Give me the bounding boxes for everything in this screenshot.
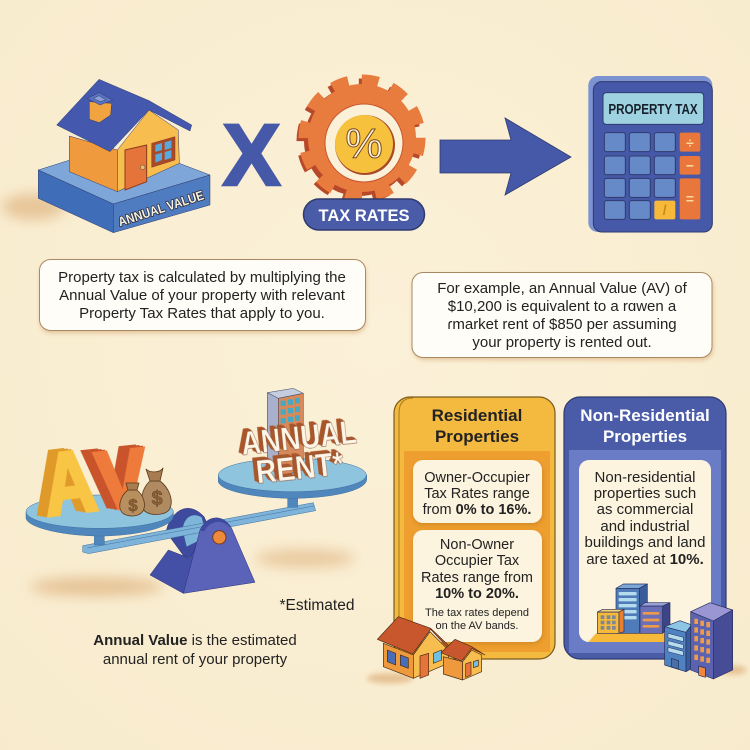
icon: calculator [588,76,712,232]
3D text: annual rent: RENT* [254,445,346,491]
icon: money bags: $ [128,496,138,515]
illustration: balance scale [26,388,367,596]
estimated note: *Estimated [280,597,354,614]
3D text: annual rent: ANNUAL [239,413,358,462]
annual value definition: annual rent of your property [103,651,288,668]
pill: tax rates [304,199,424,230]
percent sign: % [345,120,383,167]
arrow [440,118,571,195]
card: non-owner occupier rates: Non-Owner [440,537,514,553]
multiply sign: X [222,107,281,204]
residential heading [432,406,522,446]
3D letters: AV [37,431,151,535]
icon: money bags [120,468,171,516]
pill: tax rates: TAX RATES [318,207,410,225]
card: owner-occupier rates [413,460,543,525]
residential heading: Residential [432,406,522,425]
non-residential heading [580,406,710,446]
3D letters: AV: V [92,431,151,528]
card: non-residential rate: properties such [594,485,696,502]
card: non-residential rate: as commercial [597,501,693,518]
text box: example: For example, an Annual Value (AV) of [437,280,688,297]
text box: how property tax is calculated: Annual Value of your property with relevant [59,287,346,304]
icon: commercial buildings [588,584,747,679]
text box: how property tax is calculated: Property tax is calculated by multiplying the [58,269,346,286]
card: non-residential rate: Non-residential [595,469,695,486]
annual value definition [93,632,297,668]
text box: example: ɾmarket rent of $850 per assuming [447,316,677,333]
icon: house on annual value base [2,79,210,233]
card: non-owner occupier rates: on the AV bands. [436,620,518,632]
left pan [26,512,173,536]
card: non-residential rate: and industrial [600,518,690,535]
card: owner-occupier rates: Tax Rates range [424,486,530,502]
text box: how property tax is calculated: Property Tax Rates that apply to you. [79,305,325,322]
panel: residential properties [394,397,555,659]
fulcrum back arch [166,508,213,560]
card: non-owner occupier rates [413,530,543,644]
calculator screen text: PROPERTY TAX [608,102,698,118]
panel: non-residential properties [564,397,726,659]
icon: gear with percent [303,81,419,197]
3D letters: AV: A [37,432,102,535]
icon: calculator: ÷ [686,134,694,150]
beam [83,503,316,554]
card: non-residential rate: buildings and land [585,534,705,551]
non-residential heading: Non-Residential [580,406,710,425]
annual value definition: Annual Value is the estimated [93,632,297,649]
text box: example: your property is rented out. [472,334,652,351]
icon: calculator: / [663,201,667,217]
text box: example [412,272,713,360]
card: non-owner occupier rates: 10% to 20%. [435,586,519,602]
right pan [218,475,367,498]
icon: calculator: = [686,190,694,206]
text box: how property tax is calculated [40,260,366,333]
residential heading: Properties [435,427,519,446]
card: non-residential rate: are taxed at 10%. [586,551,704,568]
card: non-owner occupier rates: The tax rates depend [425,607,529,619]
icon: calculator: − [686,157,694,173]
text box: example: $10,200 is equivalent to a rɑwen a [448,298,677,315]
card: non-owner occupier rates: Occupier Tax [435,553,520,569]
non-residential heading: Properties [603,427,687,446]
card: owner-occupier rates: Owner-Occupier [424,470,530,486]
card: owner-occupier rates: from 0% to 16%. [423,502,531,518]
card: non-owner occupier rates: Rates range from [421,570,533,586]
icon: residential houses [367,617,485,684]
3D text: annual rent [239,413,358,491]
fulcrum side and front [150,537,200,593]
annual value label: ANNUAL VALUE [116,187,206,229]
card: non-residential rate [579,460,711,642]
icon: money bags: $ [151,488,163,510]
building on right pan [267,388,303,477]
